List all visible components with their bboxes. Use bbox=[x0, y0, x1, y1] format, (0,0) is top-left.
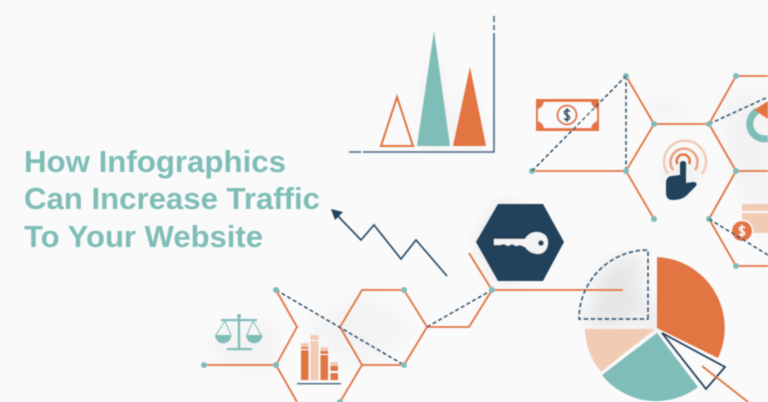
icon: touch hand bbox=[664, 141, 706, 200]
title bbox=[24, 144, 320, 254]
triangle chart bbox=[349, 16, 494, 152]
title: Can Increase Traffic bbox=[24, 181, 320, 216]
slice: peach bbox=[585, 329, 655, 372]
title: To Your Website bbox=[24, 219, 263, 254]
network lines: lower centre bbox=[201, 253, 623, 402]
slice: teal bbox=[602, 333, 698, 401]
icon: scales bbox=[215, 314, 262, 350]
icon: credit card and coin bbox=[709, 204, 768, 255]
pie chart bbox=[579, 250, 748, 402]
icon: books bar chart bbox=[297, 335, 341, 384]
slice: orange bbox=[657, 257, 725, 358]
title: How Infographics bbox=[24, 144, 286, 179]
icon: key hexagon bbox=[476, 204, 564, 281]
arrow: zigzag trend bbox=[331, 209, 447, 276]
slice: dashed outline bbox=[579, 250, 648, 319]
pointer line bbox=[702, 366, 748, 402]
icon: recycle arrows bbox=[750, 101, 768, 139]
network lines: upper right bbox=[529, 73, 768, 269]
icon: banknote bbox=[532, 76, 626, 171]
slice: outlined wedge bbox=[662, 333, 725, 389]
